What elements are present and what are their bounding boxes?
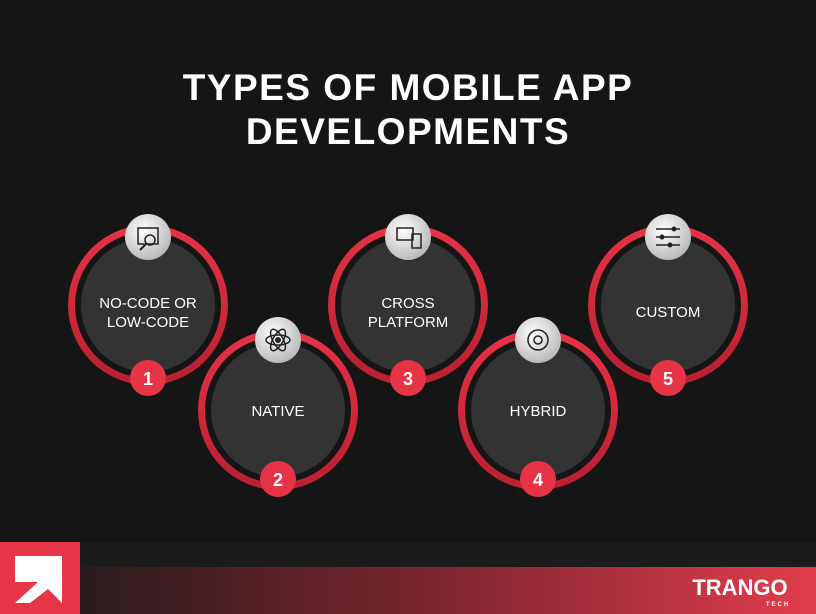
item 3: cross platform: 3 xyxy=(403,369,413,389)
footer bar: TECH xyxy=(766,602,790,608)
footer bar xyxy=(0,542,816,614)
item 2: native: NATIVE xyxy=(251,403,305,420)
item 2: native xyxy=(198,317,358,497)
item 4: hybrid: 4 xyxy=(533,470,543,490)
item 1: no-code: NO-CODE OR xyxy=(99,295,197,312)
item 1: no-code: 1 xyxy=(143,369,153,389)
item 5: custom: CUSTOM xyxy=(636,304,700,321)
item 3: cross platform xyxy=(328,214,488,396)
item 5: custom: 5 xyxy=(663,369,673,389)
item 3: cross platform: PLATFORM xyxy=(368,314,448,331)
item 2: native: 2 xyxy=(273,470,283,490)
title: DEVELOPMENTS xyxy=(246,111,570,152)
item 4: hybrid xyxy=(458,317,618,497)
item 1: no-code: LOW-CODE xyxy=(107,314,189,331)
footer bar: TRANGO xyxy=(692,575,788,600)
item 4: hybrid: HYBRID xyxy=(510,403,566,420)
item 5: custom xyxy=(588,214,748,396)
title xyxy=(183,67,633,152)
title: TYPES OF MOBILE APP xyxy=(183,67,633,108)
item 1: no-code xyxy=(68,214,228,396)
item 3: cross platform: CROSS xyxy=(381,295,435,312)
